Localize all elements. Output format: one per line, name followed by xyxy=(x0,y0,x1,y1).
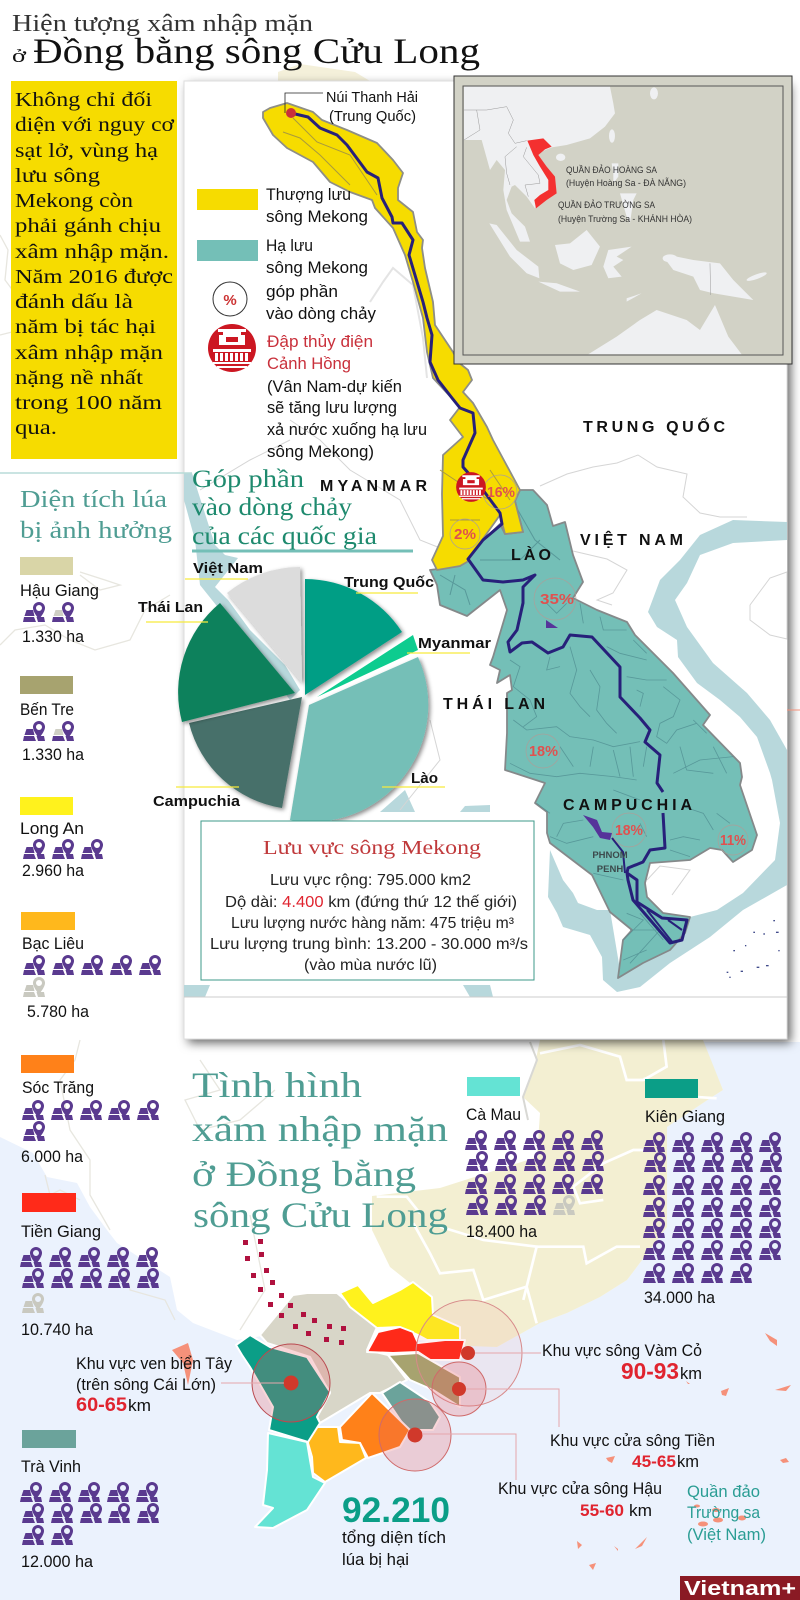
legend: upper Mekong: Thượng lưu xyxy=(266,186,351,204)
title: Đồng bằng sông Cửu Long xyxy=(33,31,480,71)
heading: salinity situation: ở Đồng bằng xyxy=(192,1154,416,1194)
tributaries in lower basin xyxy=(440,505,560,605)
pie labels: Trung Quốc xyxy=(344,575,434,591)
legend item: Soc Trang xyxy=(21,1055,159,1166)
legend item: Long An xyxy=(20,797,103,880)
callout: Vam Co river: Khu vực sông Vàm Cỏ xyxy=(542,1342,702,1360)
callout: Vam Co river: 90-93 xyxy=(621,1358,679,1384)
intro text box: Không chỉ đối xyxy=(15,89,152,111)
divider under intro xyxy=(0,472,192,474)
pie labels: Campuchia xyxy=(153,794,241,810)
intro text box: năm bị tác hại xyxy=(15,316,156,338)
callout: Tien river mouth: km xyxy=(677,1452,699,1471)
total damaged area: lúa bị hại xyxy=(342,1551,409,1569)
legend item: Tien Giang: Tiền Giang xyxy=(21,1222,101,1241)
label: Truong Sa islands: (Việt Nam) xyxy=(687,1525,766,1544)
background land patch above panel xyxy=(278,64,370,81)
province: Ca Mau xyxy=(255,1433,325,1528)
marker: Thanh Hai mountain source xyxy=(285,90,418,118)
legend: Canh Hong hydropower dam xyxy=(208,324,427,461)
country labels: LÀO xyxy=(511,545,551,564)
percent markers on the map: 18% xyxy=(529,743,558,760)
legend: flow contribution percent: % xyxy=(223,292,237,309)
heading: affected rice area: Diện tích lúa xyxy=(20,487,167,513)
province: Tien Giang xyxy=(367,1327,465,1360)
province: Ben Tre xyxy=(388,1353,460,1407)
info box: Mekong basin facts xyxy=(201,821,534,980)
legend: Canh Hong hydropower dam: sông Mekong) xyxy=(267,443,374,461)
legend: lower Mekong: Hạ lưu xyxy=(266,237,313,255)
intro text box: diện với nguy cơ xyxy=(15,114,175,136)
intro text box xyxy=(11,81,177,459)
legend item: Tra Vinh xyxy=(20,1430,159,1571)
legend item: Hau Giang: Hậu Giang xyxy=(20,581,99,600)
country labels: VIỆT NAM xyxy=(580,530,683,549)
salinity circle: Tien river mouth xyxy=(432,1362,559,1427)
info box: Mekong basin facts: Lưu vực sông Mekong xyxy=(263,837,481,859)
callout: Hau river mouth xyxy=(498,1480,662,1520)
heading: salinity situation xyxy=(192,1065,448,1235)
heading: salinity situation: Tình hình xyxy=(192,1065,362,1105)
callout: Vam Co river xyxy=(542,1342,702,1384)
country labels xyxy=(320,416,725,875)
callout: Tien river mouth xyxy=(550,1432,715,1471)
reservoir marker xyxy=(546,620,558,628)
callout: Tien river mouth: 45-65 xyxy=(632,1452,676,1471)
salinity circle: west coast xyxy=(221,1344,330,1422)
legend item: Bac Lieu xyxy=(21,912,161,1021)
legend: Canh Hong hydropower dam: Cảnh Hồng xyxy=(267,355,351,373)
percent markers on the map: 2% xyxy=(454,526,476,543)
heading: salinity situation: sông Cửu Long xyxy=(193,1195,448,1235)
legend item: Kien Giang xyxy=(643,1079,782,1307)
legend item: Kien Giang: 34.000 ha xyxy=(644,1288,716,1307)
legend item: Ca Mau: 18.400 ha xyxy=(466,1222,538,1241)
land borders xyxy=(184,268,787,997)
province: Bac Lieu xyxy=(308,1427,366,1482)
callout: west coast: 60-65 xyxy=(76,1395,127,1416)
legend item: Ben Tre: 1.330 ha xyxy=(22,745,84,764)
callout: Tien river mouth: Khu vực cửa sông Tiền xyxy=(550,1432,715,1450)
info box: Mekong basin facts: Lưu lượng trung bình: 13.200 - 30.000 m³/s xyxy=(210,936,528,953)
percent markers on the map: 16% xyxy=(487,484,515,501)
province: Kien Giang xyxy=(236,1335,330,1442)
slice: Viet Nam xyxy=(227,567,302,683)
legend: lower Mekong xyxy=(197,237,368,277)
info box: Mekong basin facts: (vào mùa nước lũ) xyxy=(304,957,437,974)
legend item: Hau Giang: 1.330 ha xyxy=(22,627,84,646)
info box: Mekong basin facts: Lưu lượng nước hàng năm: 475 triệu m³ xyxy=(231,915,514,932)
intro text box: trong 100 năm xyxy=(15,392,162,414)
intro text box: xâm nhập mặn xyxy=(15,342,163,364)
tributaries in upper basin xyxy=(283,118,510,520)
map: lower Mekong basin xyxy=(430,490,757,978)
faint map outlines on the left margin xyxy=(0,235,275,1330)
background sea xyxy=(0,1042,800,1600)
info box: Mekong basin facts: Lưu vực rộng: 795.000 km2 xyxy=(270,872,471,889)
info box: Mekong basin facts: Dộ dài: 4.400 km (đứng thứ 12 thế giới) xyxy=(225,894,517,911)
legend item: Ca Mau: Cà Mau xyxy=(466,1105,521,1124)
total damaged area: 92.210 xyxy=(342,1491,450,1530)
heading: contribution to flow by country xyxy=(192,466,413,551)
heading: affected rice area: bị ảnh hưởng xyxy=(20,518,172,544)
country labels: TRUNG QUỐC xyxy=(583,416,725,436)
legend item: Soc Trang: Sóc Trăng xyxy=(22,1078,94,1097)
title: Hiện tượng xâm nhập mặn xyxy=(12,11,313,37)
callout: west coast: km xyxy=(128,1396,151,1415)
country labels: PHNOM xyxy=(592,850,628,861)
legend: Canh Hong hydropower dam: (Vân Nam-dự kiến xyxy=(267,378,402,396)
legend: flow contribution percent: góp phần xyxy=(266,283,338,301)
callout: Hau river mouth: km xyxy=(629,1501,652,1520)
province: Long An xyxy=(340,1282,460,1340)
tiny sea islands xyxy=(727,920,780,978)
Truong Sa islands scatter xyxy=(577,710,800,1570)
legend: Canh Hong hydropower dam: xả nước xuống hạ lưu xyxy=(267,421,427,439)
panel: Mekong basin map xyxy=(184,81,787,1039)
title: ở xyxy=(12,46,27,67)
country labels: CAMPUCHIA xyxy=(563,797,692,814)
background land: Cambodia and southern Vietnam xyxy=(372,1040,723,1347)
logo: Vietnam+: Vietnam+ xyxy=(684,1578,796,1600)
salinity circle: Vam Co river xyxy=(416,1300,541,1406)
intro text box: lưu sông xyxy=(15,165,100,187)
sea band around Indochina xyxy=(184,473,787,997)
label: Truong Sa islands: Quần đảo xyxy=(687,1482,760,1501)
inset map of Southeast Asia: QUẦN ĐẢO HOÀNG SA xyxy=(566,164,657,175)
heading: contribution to flow by country: Góp phần xyxy=(192,466,305,493)
marker: Thanh Hai mountain source: Núi Thanh Hải xyxy=(326,90,418,106)
icon: dam on the map xyxy=(456,472,486,502)
title xyxy=(12,11,480,71)
percent markers on the map xyxy=(450,475,748,855)
callout: Hau river mouth: 55-60 xyxy=(580,1501,624,1520)
dotted route xyxy=(243,1239,346,1345)
country labels: THÁI LAN xyxy=(443,694,545,713)
pie labels: Lào xyxy=(411,771,438,787)
legend item: Ben Tre: Bến Tre xyxy=(20,700,74,719)
map: upper Mekong basin xyxy=(263,103,523,570)
province: Tra Vinh xyxy=(382,1382,440,1430)
legend: upper Mekong xyxy=(197,186,368,226)
legend item: Ca Mau xyxy=(465,1077,604,1241)
legend: lower Mekong: sông Mekong xyxy=(266,259,368,277)
pie labels: Việt Nam xyxy=(193,561,263,577)
inland provinces xyxy=(260,1293,407,1423)
legend item: Tien Giang xyxy=(20,1193,159,1339)
slice: Myanmar xyxy=(317,635,418,697)
slice: Lao xyxy=(290,657,428,822)
pie labels: Thái Lan xyxy=(138,600,203,616)
legend item: Soc Trang: 6.000 ha xyxy=(21,1147,83,1166)
map: Mekong river main stem xyxy=(291,113,687,943)
intro text box: đánh dấu là xyxy=(15,291,133,313)
heading: salinity situation: xâm nhập mặn xyxy=(192,1109,448,1149)
country labels: PENH xyxy=(597,864,623,875)
legend: Canh Hong hydropower dam: sẽ tăng lưu lượng xyxy=(267,399,397,417)
callout: west coast: (trên sông Cái Lớn) xyxy=(76,1376,216,1394)
label: Trung Quoc source: (Trung Quốc) xyxy=(329,109,416,125)
map: Mekong Delta provinces xyxy=(236,1282,465,1528)
callout: Vam Co river: km xyxy=(680,1364,702,1383)
legend: upper Mekong: sông Mekong xyxy=(266,208,368,226)
intro text box: Năm 2016 được xyxy=(15,266,173,288)
legend item: Kien Giang: Kiên Giang xyxy=(645,1107,725,1126)
callout: Hau river mouth: Khu vực cửa sông Hậu xyxy=(498,1480,662,1498)
total damaged area: tổng diện tích xyxy=(342,1529,446,1547)
pie labels: Myanmar xyxy=(418,636,491,652)
country labels: MYANMAR xyxy=(320,478,427,495)
logo: Vietnam+ xyxy=(680,1576,800,1600)
label: Truong Sa islands: Trường sa xyxy=(687,1503,760,1522)
legend item: Ben Tre xyxy=(20,676,84,764)
inset map of Southeast Asia: QUẦN ĐẢO TRƯỜNG SA xyxy=(558,199,655,210)
island: Phu Quoc xyxy=(172,1343,193,1385)
legend item: Tra Vinh: Trà Vinh xyxy=(21,1457,81,1476)
intro text box: Mekong còn xyxy=(15,190,133,212)
legend item: Long An: 2.960 ha xyxy=(22,861,84,880)
legend item: Bac Lieu: 5.780 ha xyxy=(27,1002,89,1021)
slice: Thai Lan xyxy=(178,603,295,722)
slice: Campuchia xyxy=(189,697,302,808)
legend item: Tien Giang: 10.740 ha xyxy=(21,1320,94,1339)
legend item: Tra Vinh: 12.000 ha xyxy=(21,1552,94,1571)
label: Truong Sa islands xyxy=(687,1482,766,1544)
intro text box: phải gánh chịu xyxy=(15,215,161,237)
salinity circle: Hau river mouth xyxy=(379,1399,516,1480)
callout: west coast xyxy=(76,1355,233,1416)
inset map of Southeast Asia: (Huyện Hoàng Sa - ĐÀ NẴNG) xyxy=(566,177,686,188)
intro text box: xâm nhập mặn. xyxy=(15,241,169,263)
legend: Canh Hong hydropower dam: Đập thủy điện xyxy=(267,333,373,351)
percent markers on the map: 18% xyxy=(615,822,643,839)
callout: west coast: Khu vực ven biển Tây xyxy=(76,1355,233,1373)
heading: contribution to flow by country: vào dòng chảy xyxy=(192,494,353,521)
Tonle Sap lake xyxy=(583,815,612,840)
inset map of Southeast Asia xyxy=(454,76,792,364)
total damaged area xyxy=(342,1491,450,1569)
percent markers on the map: 35% xyxy=(540,591,574,608)
intro text box: nặng nề nhất xyxy=(15,367,143,389)
inset map of Southeast Asia: (Huyện Trường Sa - KHÁNH HÒA) xyxy=(558,214,692,224)
intro text box: qua. xyxy=(15,417,57,439)
pie chart: flow contribution xyxy=(178,567,428,822)
heading: contribution to flow by country: của các quốc gia xyxy=(192,523,377,550)
slice: Trung Quoc xyxy=(305,579,402,695)
intro text box: sạt lở, vùng hạ xyxy=(15,140,158,162)
legend item: Bac Lieu: Bạc Liêu xyxy=(22,934,84,953)
legend item: Long An: Long An xyxy=(20,819,84,838)
legend: flow contribution percent: vào dòng chảy xyxy=(266,305,377,323)
percent markers on the map: 11% xyxy=(720,832,746,849)
heading: affected rice area xyxy=(20,487,172,544)
legend item: Hau Giang xyxy=(20,557,99,646)
legend: flow contribution percent xyxy=(213,282,377,323)
pie labels xyxy=(138,561,491,810)
province: Soc Trang xyxy=(340,1393,410,1458)
